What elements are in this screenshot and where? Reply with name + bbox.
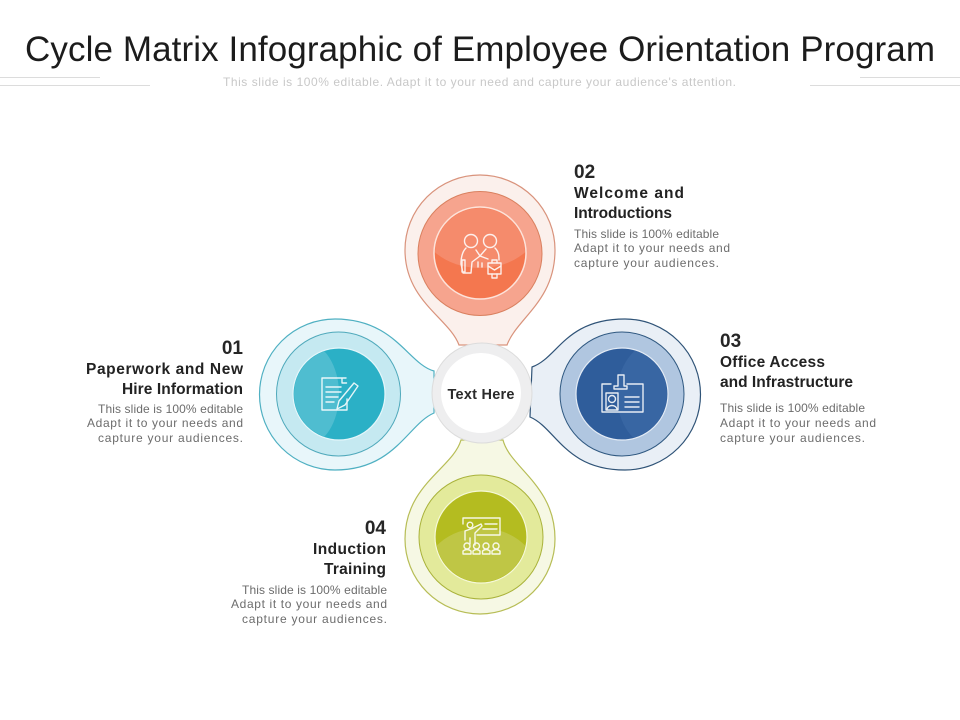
icon: id badge xyxy=(602,375,643,412)
text block: 02: This slide is 100% editable xyxy=(574,227,719,241)
text block: 01: This slide is 100% editable xyxy=(98,402,243,416)
text block: 01: Paperwork and New xyxy=(86,361,244,378)
text block: 01: Hire Information xyxy=(122,381,243,398)
petal: 03 office access (right, navy) xyxy=(530,319,700,470)
text block: 01: capture your audiences. xyxy=(98,431,243,445)
text block: 02 xyxy=(574,162,730,270)
text block: 03: Adapt it to your needs and xyxy=(720,416,876,430)
icon: document and pen xyxy=(322,378,358,410)
petal: 04 induction (bottom, olive) xyxy=(405,440,555,628)
text block: 03: Office Access xyxy=(720,354,825,371)
subtitle: This slide is 100% editable. Adapt it to your need and capture your audience's attention. xyxy=(223,75,736,89)
text block: 03: 03 xyxy=(720,331,741,352)
text block: 02: 02 xyxy=(574,162,595,183)
text block: 03: This slide is 100% editable xyxy=(720,401,865,415)
icon: handshake with briefcase xyxy=(461,234,501,278)
text block: 04: Training xyxy=(324,561,386,578)
center hub xyxy=(432,343,532,443)
text block: 03: and Infrastructure xyxy=(720,374,853,391)
text block: 02: Adapt it to your needs and xyxy=(574,241,730,255)
text block: 04: 04 xyxy=(365,518,386,539)
text block: 04: This slide is 100% editable xyxy=(242,583,387,597)
petal: 01 paperwork (left, teal) xyxy=(260,319,434,470)
hub label: Text Here xyxy=(448,387,514,403)
text block: 01 xyxy=(86,338,244,445)
header rule: left xyxy=(0,78,150,86)
text block: 01: 01 xyxy=(222,338,243,359)
header rule: right xyxy=(810,78,960,86)
text block: 03 xyxy=(720,331,876,445)
text block: 02: Welcome and xyxy=(574,185,684,202)
text block: 03: capture your audiences. xyxy=(720,431,865,445)
petal: 02 welcome (top, coral) xyxy=(405,168,555,345)
text block: 02: Introductions xyxy=(574,205,672,222)
text block: 04: Adapt it to your needs and xyxy=(231,597,387,611)
text block: 04: Induction xyxy=(313,541,386,558)
text block: 01: Adapt it to your needs and xyxy=(87,416,243,430)
icon: trainer at board with audience xyxy=(463,518,500,554)
title: Cycle Matrix Infographic of Employee Orientation Program xyxy=(25,30,935,69)
text block: 04 xyxy=(231,518,387,626)
text block: 02: capture your audiences. xyxy=(574,256,719,270)
text block: 04: capture your audiences. xyxy=(242,612,387,626)
